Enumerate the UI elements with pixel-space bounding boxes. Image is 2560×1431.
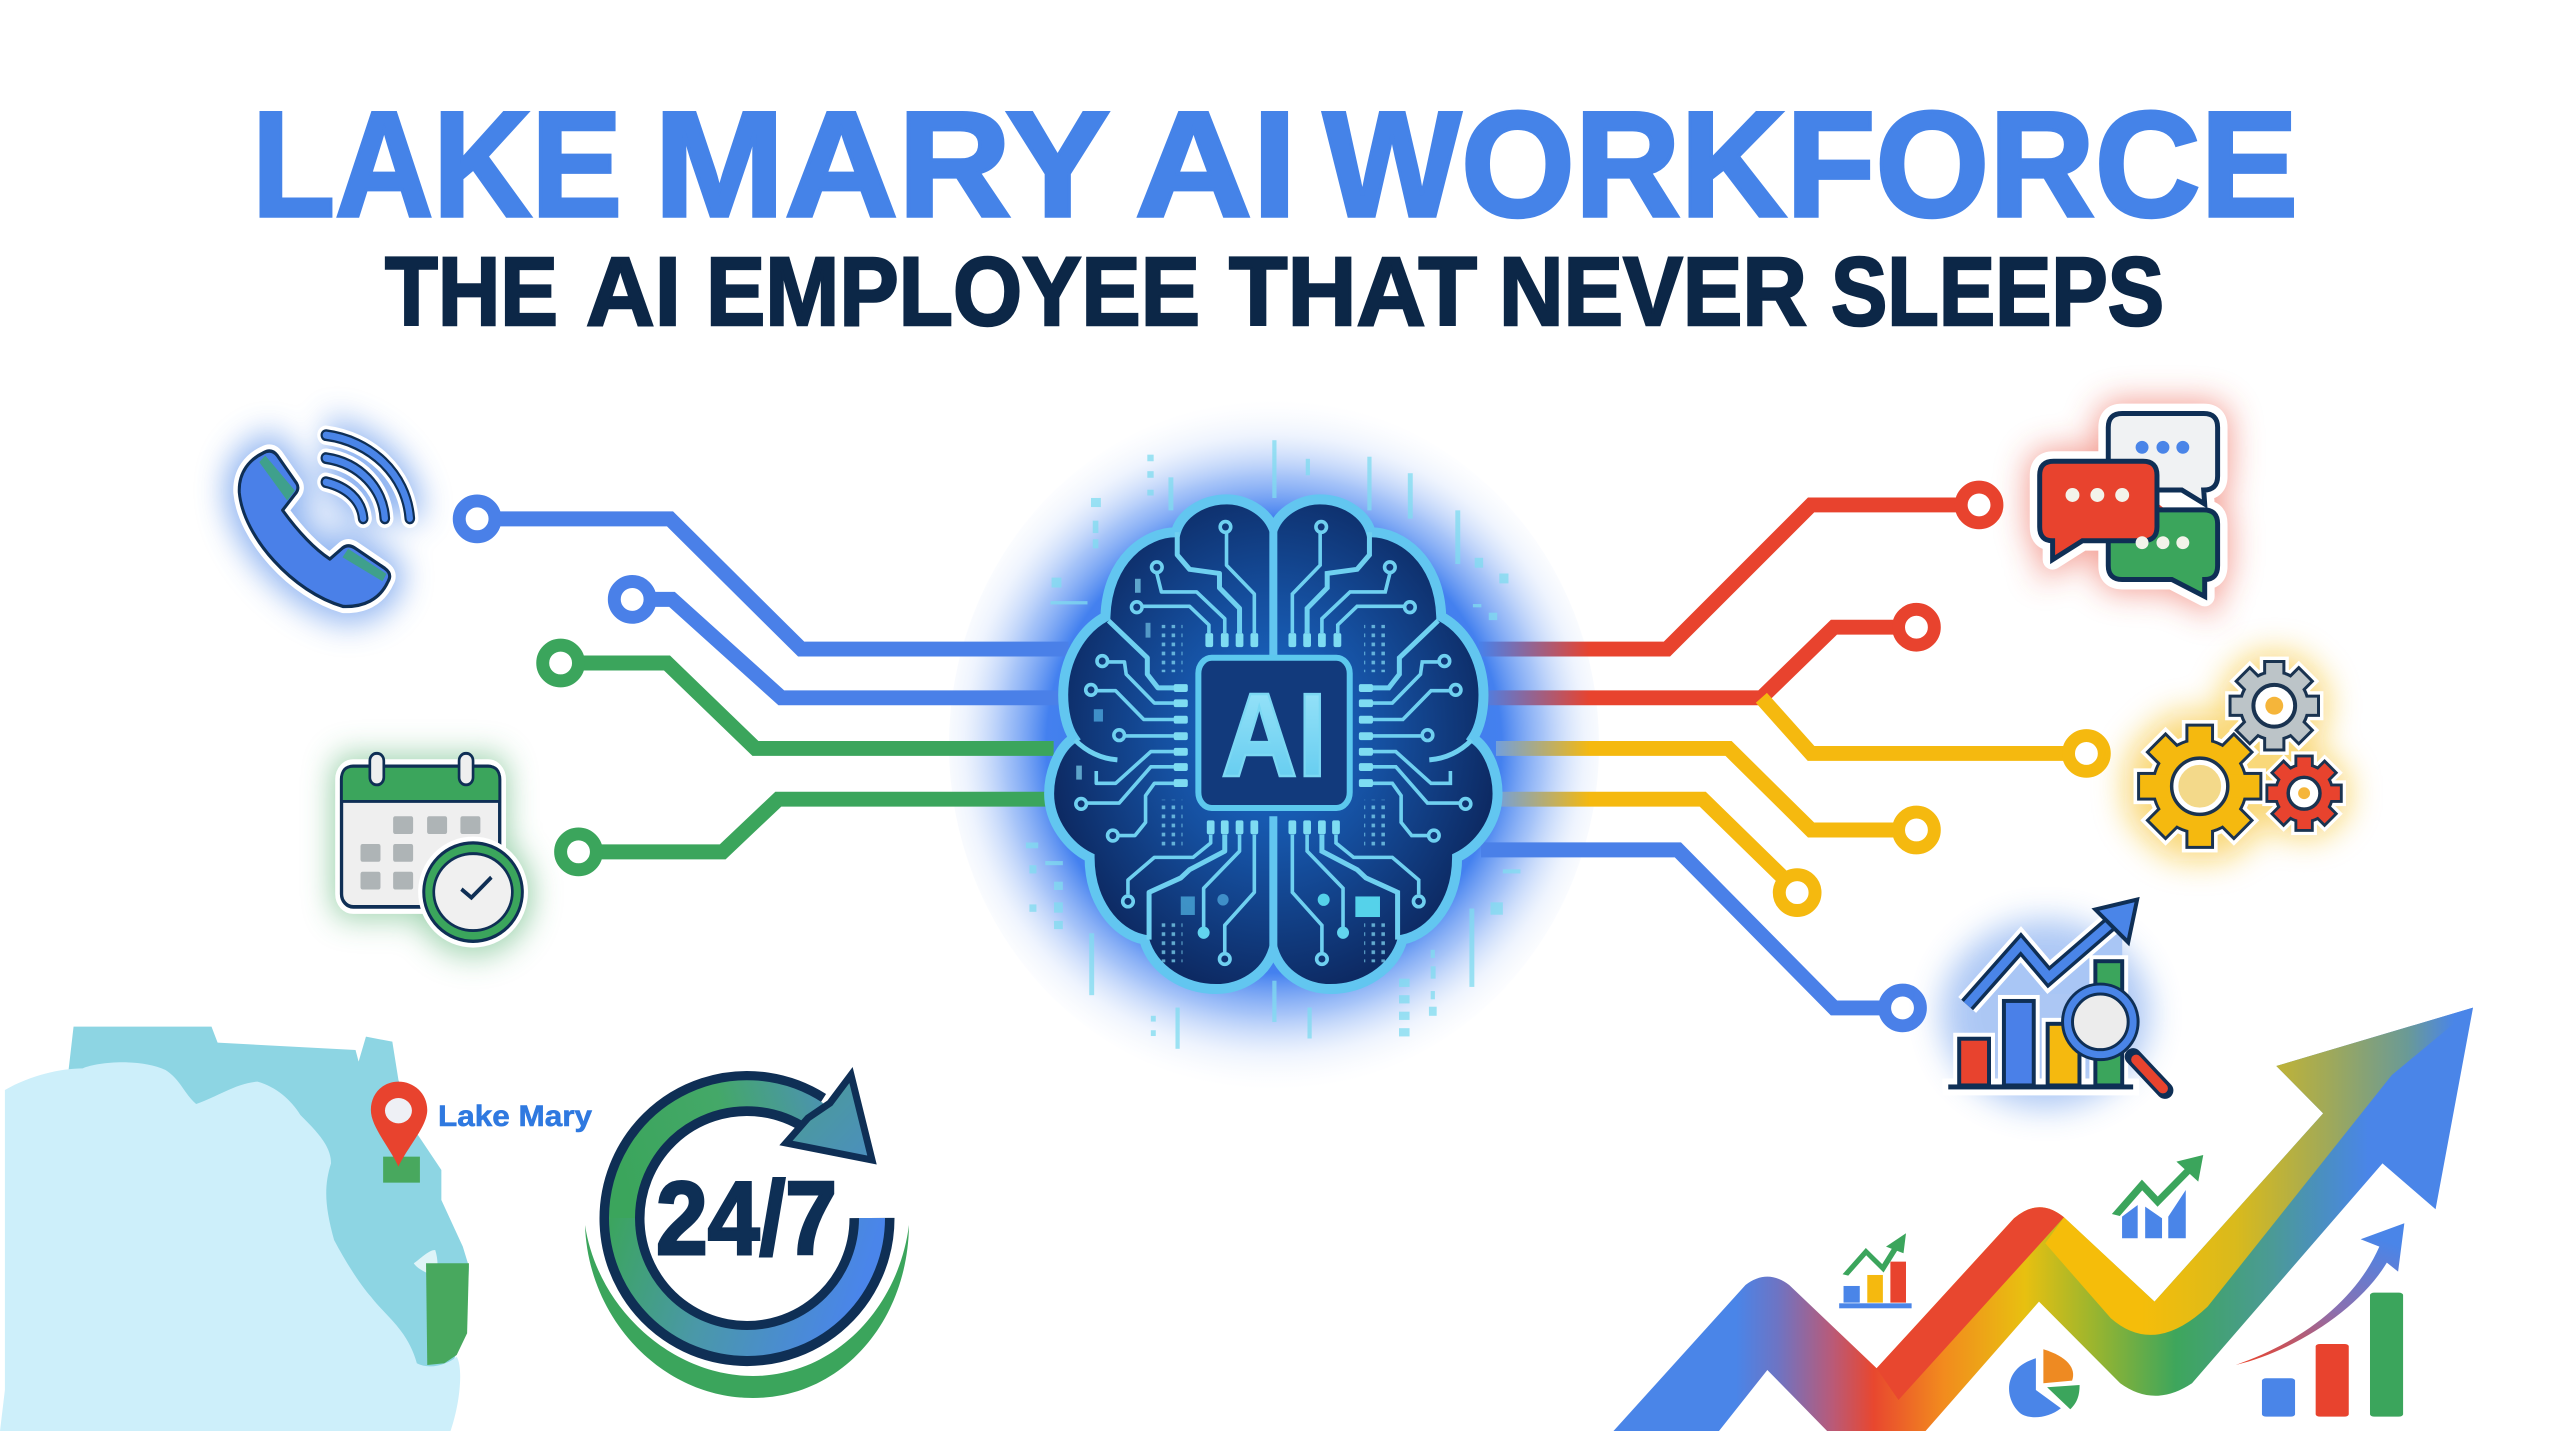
swoosh xyxy=(585,1225,909,1398)
line: red 2 xyxy=(1486,609,1934,698)
icon: chat bubbles xyxy=(2040,414,2218,596)
title: LAKE xyxy=(252,80,622,248)
icon: gears xyxy=(2140,663,2340,846)
left hemisphere pads and dots xyxy=(1076,579,1258,962)
icon: phone xyxy=(239,435,410,607)
left circuit lines xyxy=(459,501,1069,870)
brain glow xyxy=(949,400,1599,1090)
line: blue 1 xyxy=(459,501,1069,649)
growth arrow xyxy=(1608,1008,2473,1431)
title: WORKFORCE xyxy=(1323,80,2298,248)
AI chip frame xyxy=(1198,658,1350,808)
pie chart xyxy=(2009,1349,2080,1417)
subtitle: THAT xyxy=(1229,237,1477,346)
map: Florida xyxy=(0,1027,469,1431)
right circuit lines xyxy=(1479,487,2104,1026)
line: blue 2 xyxy=(614,581,1059,698)
left hemisphere traces xyxy=(1075,522,1254,964)
line: green 1 xyxy=(543,645,1054,748)
icon: analytics magnifier xyxy=(1941,900,2165,1108)
subtitle: THE xyxy=(385,237,558,346)
green county south xyxy=(426,1263,469,1365)
right hemisphere traces xyxy=(1288,522,1472,964)
line: red 1 xyxy=(1479,487,1997,649)
gulf of mexico xyxy=(0,1062,460,1431)
line: yellow 2 xyxy=(1496,748,1934,848)
line: yellow 1 xyxy=(1761,698,2104,771)
title: AI xyxy=(1135,80,1297,248)
title: MARY xyxy=(654,80,1110,248)
lake okeechobee xyxy=(414,1250,438,1276)
red band xyxy=(1877,1207,2064,1400)
label: Lake Mary: Lake Mary xyxy=(438,1100,592,1133)
bar chart with swoosh arrow xyxy=(2236,1223,2404,1417)
24/7 text: 24/7 xyxy=(656,1161,837,1277)
arrowhead xyxy=(786,1075,872,1160)
mini chart: blue bars with arrow xyxy=(2116,1155,2203,1238)
subtitle: NEVER xyxy=(1499,237,1807,346)
brain xyxy=(1049,499,1498,989)
line: blue right xyxy=(1481,850,1920,1026)
subtitle: AI xyxy=(586,237,681,346)
florida land xyxy=(61,1027,469,1370)
pin xyxy=(371,1082,427,1167)
line: yellow 3 xyxy=(1496,799,1815,911)
brain data particles xyxy=(1026,440,1520,1049)
icon: 24/7 cycle xyxy=(585,1075,909,1398)
yellow band xyxy=(2045,1008,2473,1335)
ring xyxy=(622,1093,872,1344)
title xyxy=(252,80,2298,248)
icon: calendar with clock xyxy=(332,753,533,955)
subtitle: SLEEPS xyxy=(1831,237,2164,346)
mini chart: rising bars xyxy=(1839,1233,1912,1308)
green county lake mary xyxy=(383,1157,420,1183)
AI chip label: AI xyxy=(1221,669,1327,802)
subtitle xyxy=(385,237,2164,346)
line: green 2 xyxy=(561,799,1049,870)
subtitle: EMPLOYEE xyxy=(706,237,1200,346)
